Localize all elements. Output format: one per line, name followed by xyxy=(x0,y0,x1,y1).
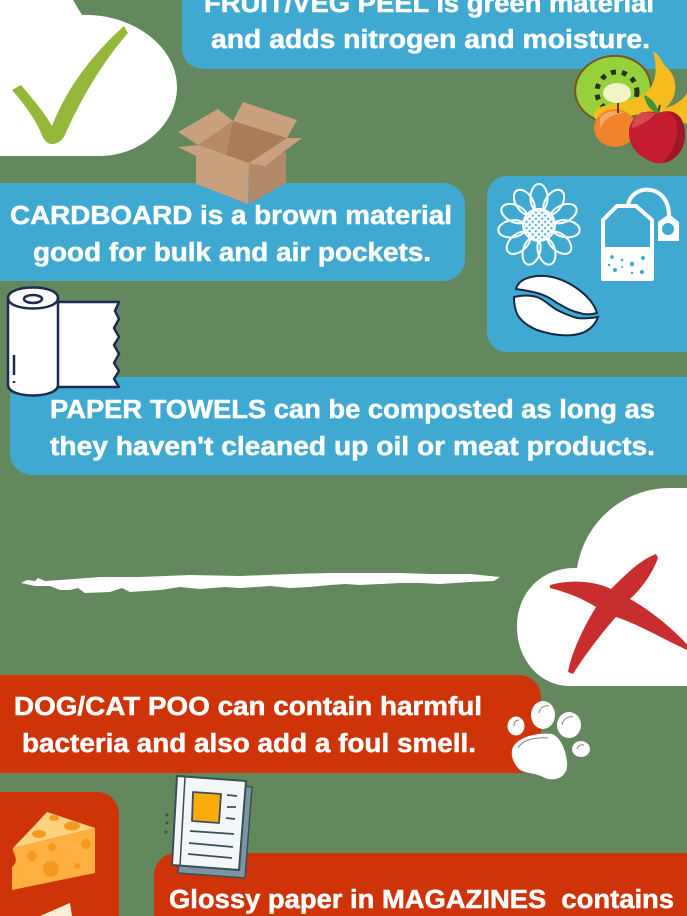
icon: paper towel roll xyxy=(8,288,119,396)
orange fruit xyxy=(594,103,636,147)
text: dog and cat poo xyxy=(14,693,482,758)
icon: coffee bean xyxy=(514,276,598,335)
panel: magazines xyxy=(154,853,687,916)
panel: cheese xyxy=(0,792,119,916)
green check mark xyxy=(12,26,128,144)
panel: dog and cat poo xyxy=(0,675,541,773)
panel: cardboard xyxy=(0,183,465,281)
towel sheet xyxy=(56,302,119,387)
white cloud xyxy=(0,0,177,156)
banana xyxy=(594,51,687,124)
icon: cardboard box xyxy=(178,102,302,204)
icon: check mark cloud xyxy=(0,0,177,156)
text: cardboard xyxy=(10,202,452,267)
panel: flower tea coffee xyxy=(487,176,687,352)
red apple xyxy=(629,105,685,163)
text: fruit and veg peel xyxy=(204,0,654,54)
icon: cross cloud xyxy=(517,488,687,686)
icon: paw print xyxy=(508,701,590,779)
icon: tea bag xyxy=(602,190,679,280)
icon: cheese wedge xyxy=(12,812,95,890)
text: paper towels: they haven't cleaned up oil or meat products. xyxy=(50,433,655,461)
text: fruit and veg peel: and adds nitrogen and moisture. xyxy=(211,26,650,54)
text: dog and cat poo: DOG/CAT POO can contain harmful xyxy=(14,693,482,721)
brush stroke divider xyxy=(21,573,500,593)
kiwi xyxy=(569,49,657,129)
icon: magazine xyxy=(172,776,252,878)
towel roll xyxy=(8,288,58,396)
apple leaf xyxy=(644,95,659,113)
icon: fruit group xyxy=(569,49,687,163)
text: cardboard: CARDBOARD is a brown material xyxy=(10,202,452,230)
red cross xyxy=(550,554,687,674)
text: cardboard: good for bulk and air pockets. xyxy=(33,239,431,267)
text: dog and cat poo: bacteria and also add a foul smell. xyxy=(22,730,476,758)
text: magazines: Glossy paper in MAGAZINES contains xyxy=(169,886,674,914)
icon: cream corner shape xyxy=(40,903,72,916)
decorative dots beside magazine xyxy=(164,814,168,834)
text: paper towels xyxy=(50,396,655,461)
white cloud xyxy=(517,488,687,686)
panel: fruit and veg peel xyxy=(182,0,687,69)
icon: flower xyxy=(497,184,581,267)
text: paper towels: PAPER TOWELS can be composted as long as xyxy=(50,396,655,424)
panel: paper towels xyxy=(10,377,687,475)
